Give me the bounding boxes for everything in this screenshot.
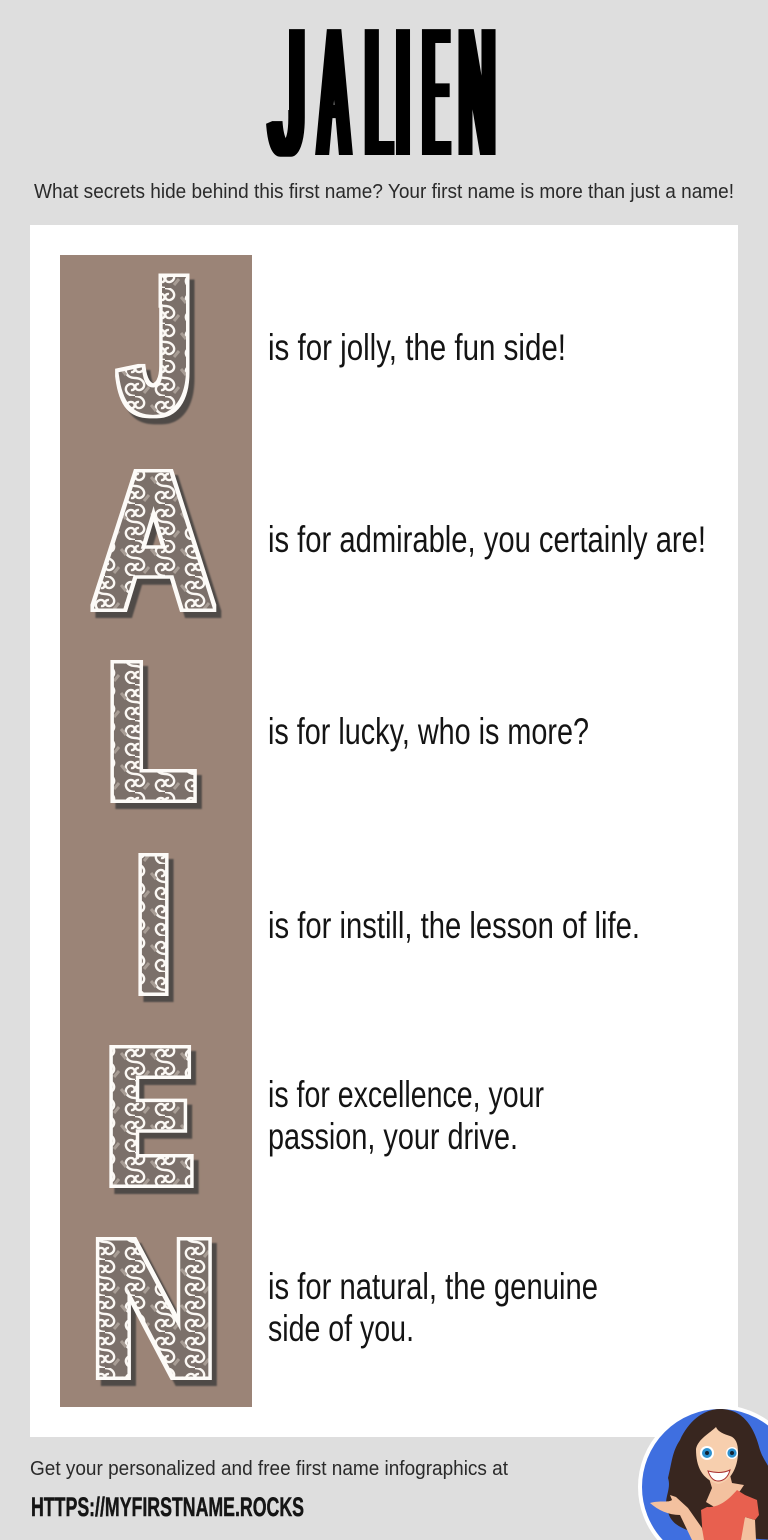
text: I line: is for instill, the lesson of life.	[268, 905, 640, 946]
arm and hand	[650, 1495, 704, 1540]
panel: letter column	[60, 240, 252, 1414]
letter L: L	[106, 626, 196, 838]
footer text: Get your personalized and free first name infographics at	[30, 1458, 508, 1480]
text: E line	[268, 1074, 544, 1157]
letter J: J	[119, 240, 193, 451]
letter N: N	[90, 1204, 217, 1414]
text: E line: passion, your drive.	[268, 1116, 518, 1157]
panel: white card	[30, 225, 738, 1437]
eyes	[700, 1446, 714, 1460]
subtitle: What secrets hide behind this first name? Your first name is more than just a name!	[34, 181, 734, 203]
text: E line: is for excellence, your	[268, 1074, 544, 1115]
title	[266, 29, 496, 157]
text: N line	[268, 1266, 598, 1349]
hair	[666, 1409, 768, 1540]
face	[696, 1427, 738, 1484]
letter E: E	[106, 1012, 193, 1222]
letter I: I	[135, 820, 172, 1030]
footer url: HTTPS://MYFIRSTNAME.ROCKS	[31, 1492, 304, 1522]
smile	[708, 1470, 730, 1481]
text: N line: side of you.	[268, 1308, 414, 1349]
shirt	[701, 1490, 759, 1540]
icon: avatar	[640, 1407, 768, 1540]
text: L line: is for lucky, who is more?	[268, 711, 589, 752]
text: N line: is for natural, the genuine	[268, 1266, 598, 1307]
right arm	[741, 1517, 756, 1540]
letter A: A	[94, 436, 214, 646]
text: J line: is for jolly, the fun side!	[268, 327, 566, 368]
neck	[706, 1475, 744, 1508]
